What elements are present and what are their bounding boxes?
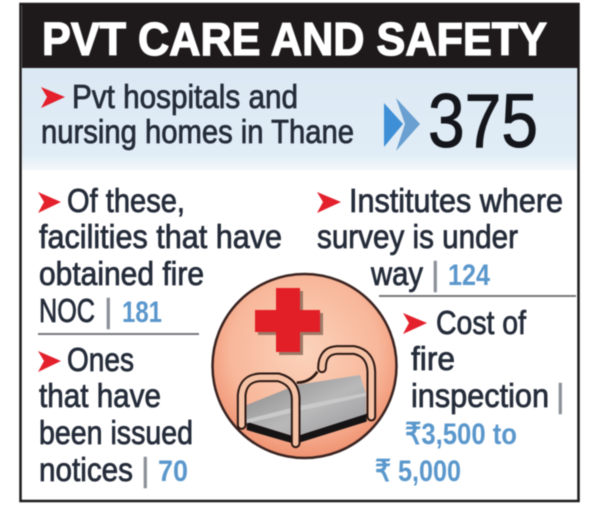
block: notices: notices (39, 451, 133, 488)
block: survey: way (370, 255, 423, 292)
block: inspection cost: fire (411, 340, 455, 377)
block: survey: Institutes where (349, 182, 563, 219)
icon: medical bed badge (212, 274, 396, 458)
text: hospitals label: nursing homes in Thane (41, 113, 354, 150)
block: fire NOC (38, 182, 282, 329)
icon: red arrow (403, 313, 427, 334)
block: survey: 124 (448, 259, 490, 292)
text: hospitals label (41, 78, 354, 150)
title: PVT CARE AND SAFETY (42, 13, 547, 65)
stat: hospitals total (41, 78, 538, 164)
icon: red arrow (41, 87, 65, 108)
icon: red arrow (317, 192, 341, 213)
block: survey: survey is under (317, 218, 518, 255)
block: fire NOC: obtained fire (39, 255, 204, 292)
icon: red arrow (38, 192, 61, 213)
block: inspection cost: Cost of (436, 304, 527, 341)
block: fire NOC: facilities that have (39, 218, 282, 255)
block: inspection cost (375, 304, 565, 488)
block: notices: Ones (67, 341, 134, 378)
number 375: 375 (428, 79, 538, 164)
block: notices: 70 (158, 455, 188, 488)
icon: red arrow (38, 351, 61, 372)
block: fire NOC: NOC (39, 292, 95, 329)
block: notices: | (141, 451, 150, 488)
icon: blue chevrons (384, 98, 420, 151)
block: inspection cost: | (556, 377, 565, 414)
block: inspection cost: inspection (411, 377, 549, 414)
panel: light blue band (22, 68, 577, 170)
icon: red cross (255, 288, 323, 355)
block: fire NOC: 181 (122, 296, 162, 329)
block: inspection cost: ₹ 5,000 (375, 455, 461, 488)
block: fire NOC: Of these, (67, 182, 185, 219)
text: hospitals label: Pvt hospitals and (72, 78, 298, 115)
block: survey: | (431, 255, 440, 292)
block: fire NOC: | (104, 292, 113, 329)
icon: bed (242, 350, 371, 444)
block: survey (317, 182, 563, 292)
block: notices (38, 341, 193, 488)
block: inspection cost: ₹3,500 to (405, 418, 517, 451)
header (22, 3, 579, 68)
block: notices: that have (39, 377, 161, 414)
block: notices: been issued (39, 414, 193, 451)
